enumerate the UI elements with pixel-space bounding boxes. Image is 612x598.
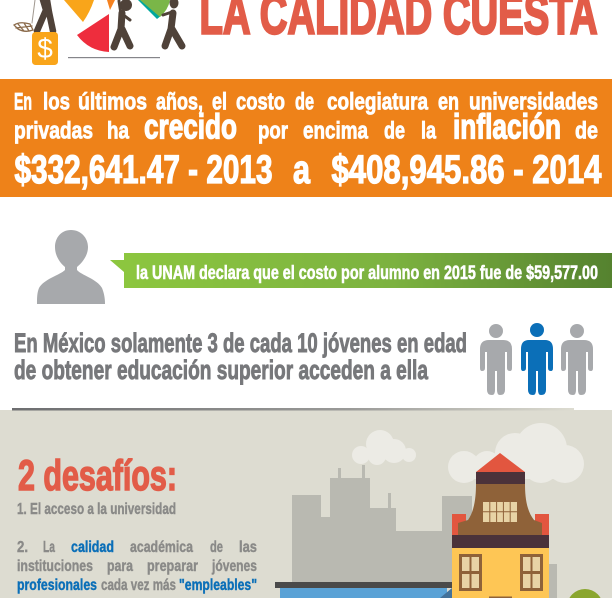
text: intro line 1: años, bbox=[156, 88, 203, 116]
callout: UNAM cost bbox=[110, 253, 612, 288]
illustration: university and city bbox=[275, 423, 603, 598]
right window bbox=[520, 554, 543, 591]
text: challenge 2: La bbox=[43, 539, 55, 556]
icon: gray person bbox=[480, 324, 512, 395]
panel: tuition cost banner bbox=[0, 79, 612, 197]
text: intro line 2: privadas bbox=[14, 118, 93, 144]
blue building bbox=[275, 582, 452, 598]
text: intro line 1: últimos bbox=[78, 88, 147, 116]
icon: red pie slice bbox=[77, 14, 109, 52]
icon: dollar box bbox=[32, 32, 58, 65]
tree top bbox=[567, 589, 603, 598]
icon: dollar box: $ bbox=[37, 33, 53, 64]
icon: figure with rope bbox=[14, 0, 53, 31]
yellow university building bbox=[452, 453, 549, 598]
text: intro line 1: costo bbox=[236, 88, 285, 116]
text: access statistic: de obtener educación superior acceden a ella bbox=[14, 355, 429, 385]
text: intro line 1: colegiatura bbox=[327, 88, 429, 116]
icon: figure carrying green slice bbox=[163, 0, 182, 46]
text: challenge 1: 1. El acceso a la universidad bbox=[17, 501, 176, 518]
icon: figure carrying red slice bbox=[114, 0, 132, 47]
text: challenge 2: de bbox=[210, 539, 223, 556]
icon: person silhouette bbox=[37, 230, 105, 304]
door top bbox=[489, 596, 512, 598]
text: intro line 2 bbox=[14, 108, 598, 146]
text: intro line 2: inflación bbox=[453, 108, 561, 146]
icon: large cloud bbox=[448, 423, 584, 483]
text: access statistic bbox=[14, 328, 467, 385]
text: intro line 2: crecido bbox=[144, 108, 237, 146]
text: challenge 2: preparar bbox=[147, 558, 198, 575]
text: cost 2013: $332,641.47 - 2013 bbox=[14, 148, 272, 192]
text: challenge 2: instituciones bbox=[17, 558, 93, 575]
icon: gray person bbox=[561, 324, 593, 395]
text: challenge 2: cada vez más bbox=[101, 577, 176, 594]
text: intro line 2: de bbox=[575, 118, 598, 144]
icon: small cloud bbox=[352, 430, 416, 465]
icon: blue person bbox=[521, 323, 553, 395]
icon: teal slice edge bbox=[138, 0, 162, 19]
text: challenge 2: las bbox=[239, 539, 257, 556]
panel: challenges background bbox=[0, 410, 612, 598]
text: challenge 2: académica bbox=[130, 539, 193, 556]
text: intro line 2: de bbox=[384, 118, 405, 144]
ground line bbox=[68, 57, 160, 58]
text: intro line 2: ha bbox=[107, 118, 130, 144]
text: intro line 2: por bbox=[258, 118, 288, 144]
text: challenge 2: calidad bbox=[71, 539, 114, 556]
text: connector: a bbox=[293, 148, 311, 192]
text: intro line 2: la bbox=[421, 118, 436, 144]
icon: three people bbox=[480, 323, 593, 395]
text: intro line 1 bbox=[14, 88, 598, 116]
text: challenge 2: jóvenes bbox=[211, 558, 257, 575]
text: challenge 2: profesionales bbox=[17, 577, 97, 594]
text: challenge 2: "empleables" bbox=[179, 577, 257, 594]
text: intro line 1: de bbox=[295, 88, 314, 116]
left window bbox=[459, 554, 482, 591]
illustration: people carrying pie chart pieces bbox=[14, 0, 182, 65]
text: challenge 2: 2. bbox=[17, 539, 28, 556]
text: challenge 2: para bbox=[107, 558, 133, 575]
text: intro line 2: encima bbox=[303, 118, 369, 144]
text: intro line 1: los bbox=[43, 88, 70, 116]
text: intro line 1: el bbox=[212, 88, 227, 116]
icon: small orange slice bbox=[107, 0, 115, 10]
heading: 2 desafíos: 2 desafíos: bbox=[18, 452, 177, 500]
text: challenge 2 bbox=[17, 539, 257, 594]
text: intro line 1: en bbox=[438, 88, 459, 116]
upper window bbox=[483, 502, 517, 522]
icon: green pie slice bbox=[140, 0, 170, 17]
city skyline bbox=[292, 465, 557, 598]
text: intro line 1: En bbox=[14, 88, 32, 116]
icon: orange pie slice bbox=[64, 0, 94, 22]
